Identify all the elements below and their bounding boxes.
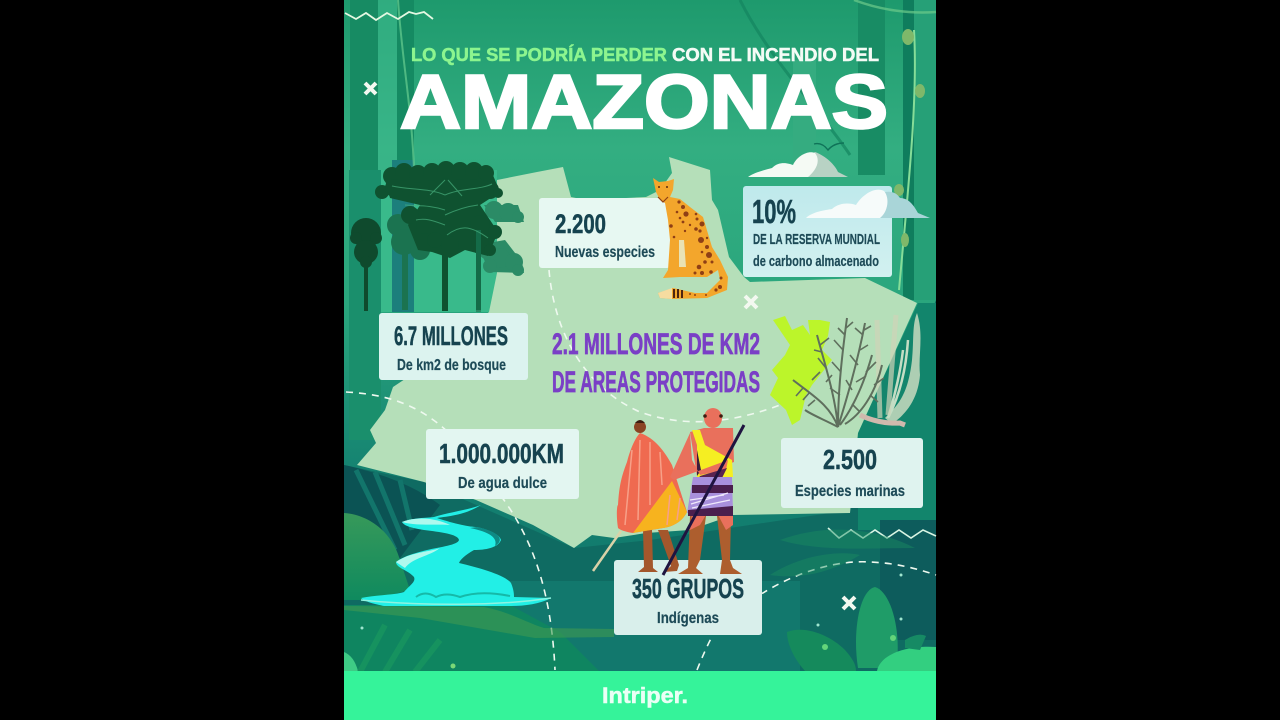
card: 350 indigenous groups bbox=[614, 560, 762, 635]
card: 2.200 new species bbox=[539, 198, 670, 268]
panel: jungle background bbox=[344, 0, 936, 672]
icon: river bbox=[361, 505, 551, 606]
card: 1,000,000 km fresh water: 1.000.000KM bbox=[439, 438, 564, 469]
zigzag top left bbox=[345, 12, 433, 20]
x mark top bbox=[365, 83, 376, 94]
spear bbox=[663, 425, 744, 575]
icon: indigenous people bbox=[593, 408, 744, 575]
dots bbox=[360, 574, 902, 668]
vine leaves bbox=[894, 29, 925, 247]
card: 10% carbon reserve: de carbono almacenado bbox=[753, 253, 879, 270]
footer bar bbox=[344, 671, 936, 720]
x mark map bbox=[745, 296, 757, 308]
icon: jaguar bbox=[653, 178, 728, 299]
card: 1,000,000 km fresh water: De agua dulce bbox=[458, 475, 547, 492]
protected areas heading bbox=[552, 328, 760, 399]
title: AMAZONAS bbox=[400, 60, 888, 145]
icon: trees bbox=[350, 161, 524, 312]
foliage right bbox=[770, 530, 936, 671]
title subtitle: CON EL INCENDIO DEL bbox=[672, 45, 879, 65]
card: 6.7 million km2 of forest: De km2 de bosque bbox=[397, 357, 506, 374]
icon: plants bbox=[770, 313, 921, 427]
card: 2,500 marine species: 2.500 bbox=[823, 444, 877, 475]
card: 1,000,000 km fresh water bbox=[426, 429, 579, 499]
dashed routes bbox=[346, 270, 936, 670]
x mark bottom bbox=[843, 597, 855, 609]
card: 6.7 million km2 of forest: 6.7 MILLONES bbox=[394, 321, 508, 351]
card: 2.200 new species: Nuevas especies bbox=[555, 244, 655, 261]
left tree bbox=[350, 218, 382, 311]
card: 10% carbon reserve bbox=[743, 186, 892, 277]
logo: Intriper. bbox=[602, 683, 688, 708]
title subtitle: LO QUE SE PODRÍA PERDER bbox=[411, 44, 667, 65]
title subtitle bbox=[411, 44, 879, 65]
card: 350 indigenous groups: 350 GRUPOS bbox=[632, 573, 744, 604]
vine top right bbox=[899, 30, 915, 290]
mid shade tree bbox=[387, 208, 430, 310]
cloud top bbox=[748, 152, 848, 177]
foliage left bbox=[344, 513, 614, 672]
cloud over card bbox=[806, 190, 930, 218]
main tree bbox=[375, 161, 503, 311]
birds bbox=[814, 143, 844, 150]
card: 10% carbon reserve: 10% bbox=[752, 193, 796, 230]
light back tree bbox=[476, 201, 524, 312]
card: 2,500 marine species: Especies marinas bbox=[795, 483, 905, 500]
card: 2,500 marine species bbox=[781, 438, 923, 508]
map of the Amazon bbox=[357, 157, 917, 548]
zigzag right bbox=[828, 528, 936, 538]
card: 6.7 million km2 of forest bbox=[379, 313, 528, 380]
woman bbox=[593, 420, 687, 572]
protected areas heading: DE AREAS PROTEGIDAS bbox=[552, 366, 760, 399]
protected areas heading: 2.1 MILLONES DE KM2 bbox=[552, 328, 760, 361]
card: 10% carbon reserve: DE LA RESERVA MUNDIAL bbox=[753, 231, 880, 248]
leaf rays behind river bbox=[344, 465, 440, 558]
card: 2.200 new species: 2.200 bbox=[555, 209, 606, 239]
man bbox=[670, 408, 742, 574]
vine top left bbox=[398, 0, 414, 170]
card: 350 indigenous groups: Indígenas bbox=[657, 610, 719, 627]
